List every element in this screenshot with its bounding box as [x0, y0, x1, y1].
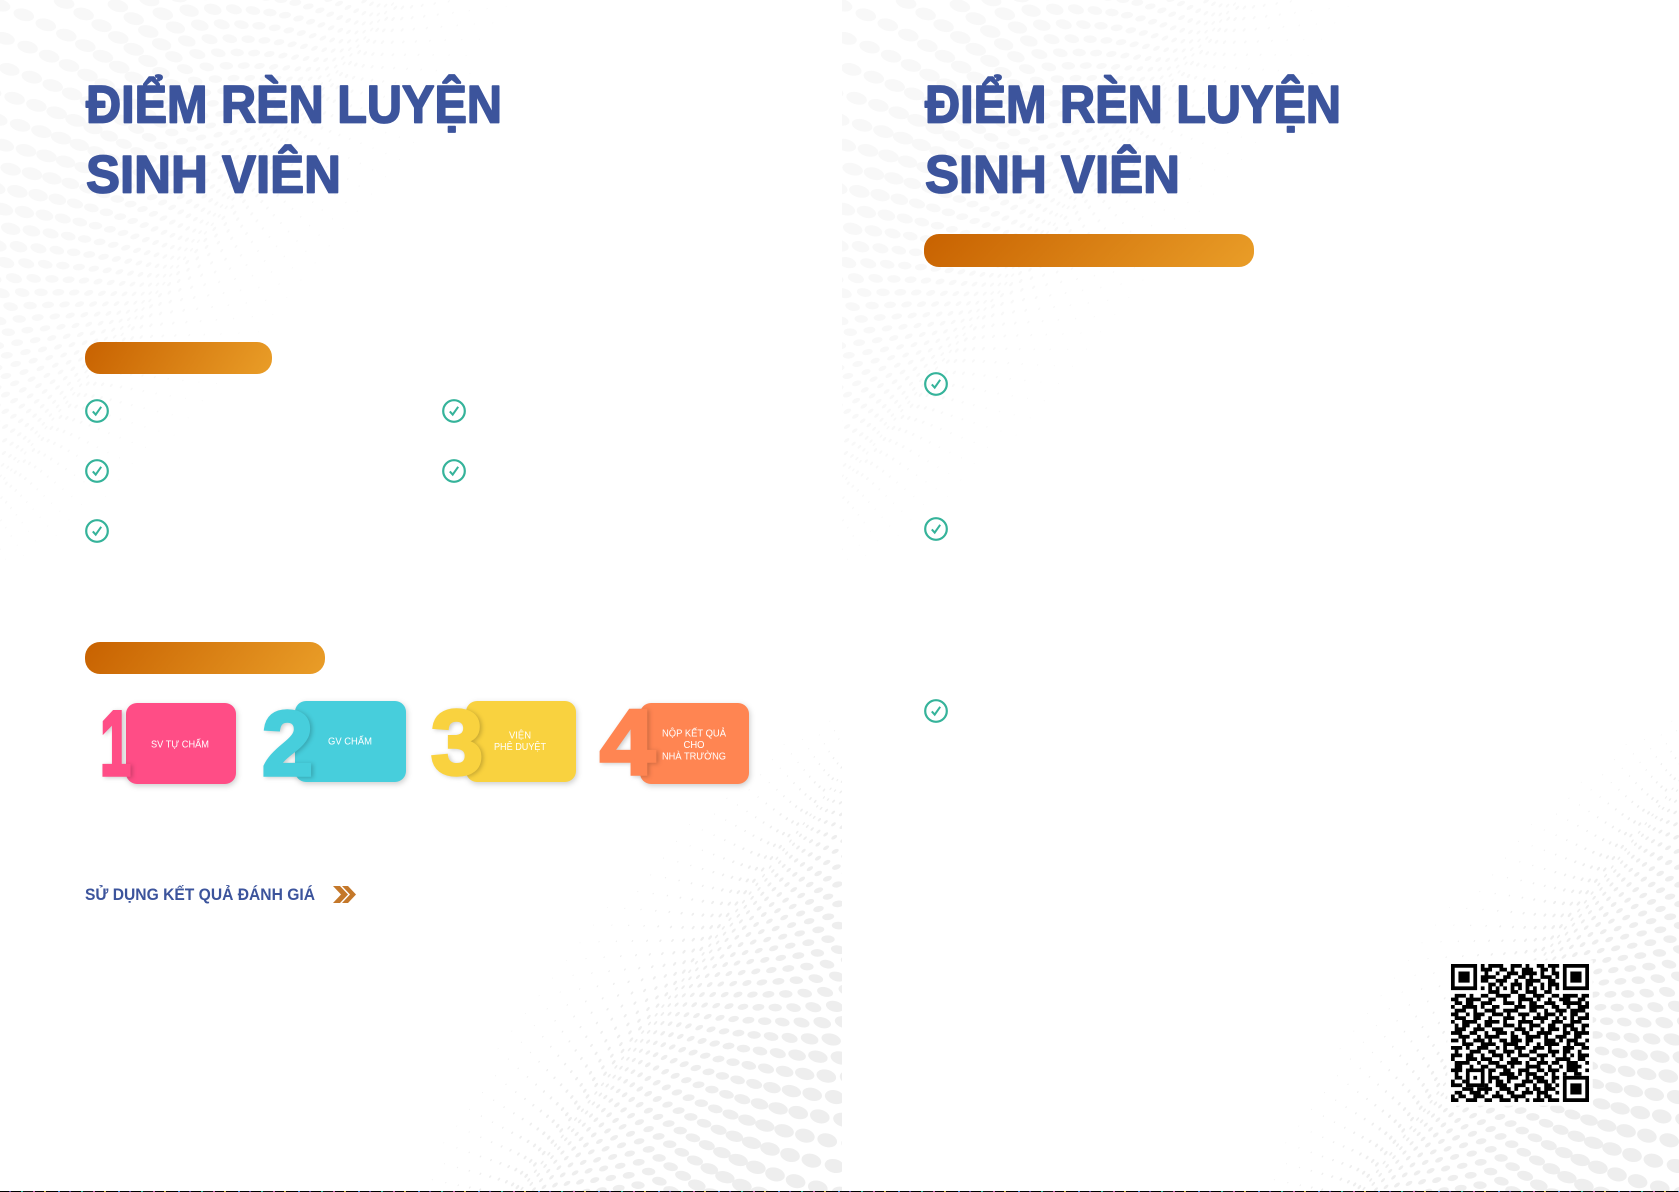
icon: check 1 [86, 400, 108, 422]
title: right page [925, 74, 1341, 204]
step 4: Nộp kết quả cho nhà trường: CHO [684, 740, 705, 751]
title: right page: SINH VIÊN [925, 144, 1180, 204]
title: right page: ĐIỂM RÈN LUYỆN [925, 74, 1341, 134]
heading pill: first section [85, 342, 272, 374]
step 4: Nộp kết quả cho nhà trường: NỘP KẾT QUẢ [662, 726, 726, 740]
checklist: first section [86, 400, 465, 542]
step 4: Nộp kết quả cho nhà trường: NHÀ TRƯỜNG [662, 750, 726, 762]
icon: check 3 [925, 700, 947, 722]
step 3: Viện phê duyệt: VIỆN [509, 728, 531, 742]
step 1: SV tự chấm: SV TỰ CHẤM [151, 738, 209, 750]
step 3: Viện phê duyệt: 3 [431, 692, 483, 794]
icon: check 5 [443, 460, 465, 482]
step 2: GV chấm: GV CHẤM [328, 734, 372, 748]
step 3: Viện phê duyệt [431, 692, 576, 794]
step 2: GV chấm [262, 693, 406, 795]
icon: check 1 [925, 373, 947, 395]
heading pill: right section [924, 234, 1254, 267]
QR code [1447, 960, 1593, 1106]
step 3: Viện phê duyệt: PHÊ DUYỆT [494, 740, 546, 753]
step 4: Nộp kết quả cho nhà trường: 4 [600, 692, 655, 794]
heading pill: process section [85, 642, 325, 674]
title: left page: SINH VIÊN [86, 144, 341, 204]
step 1: SV tự chấm [100, 693, 236, 795]
panel: left page [85, 74, 749, 904]
icon: double chevron arrow [333, 886, 356, 903]
title: left page: ĐIỂM RÈN LUYỆN [86, 74, 502, 134]
panel: right page [924, 74, 1593, 1106]
icon: check 2 [925, 518, 947, 540]
step 2: GV chấm: 2 [262, 693, 313, 795]
step 4: Nộp kết quả cho nhà trường [600, 692, 749, 794]
section label: use of results: SỬ DỤNG KẾT QUẢ ĐÁNH GIÁ [85, 885, 315, 904]
checklist: right section [925, 373, 947, 722]
process steps [100, 692, 749, 795]
icon: check 2 [86, 460, 108, 482]
title: left page [86, 74, 502, 204]
step 1: SV tự chấm: 1 [100, 693, 131, 795]
icon: check 3 [86, 520, 108, 542]
icon: check 4 [443, 400, 465, 422]
